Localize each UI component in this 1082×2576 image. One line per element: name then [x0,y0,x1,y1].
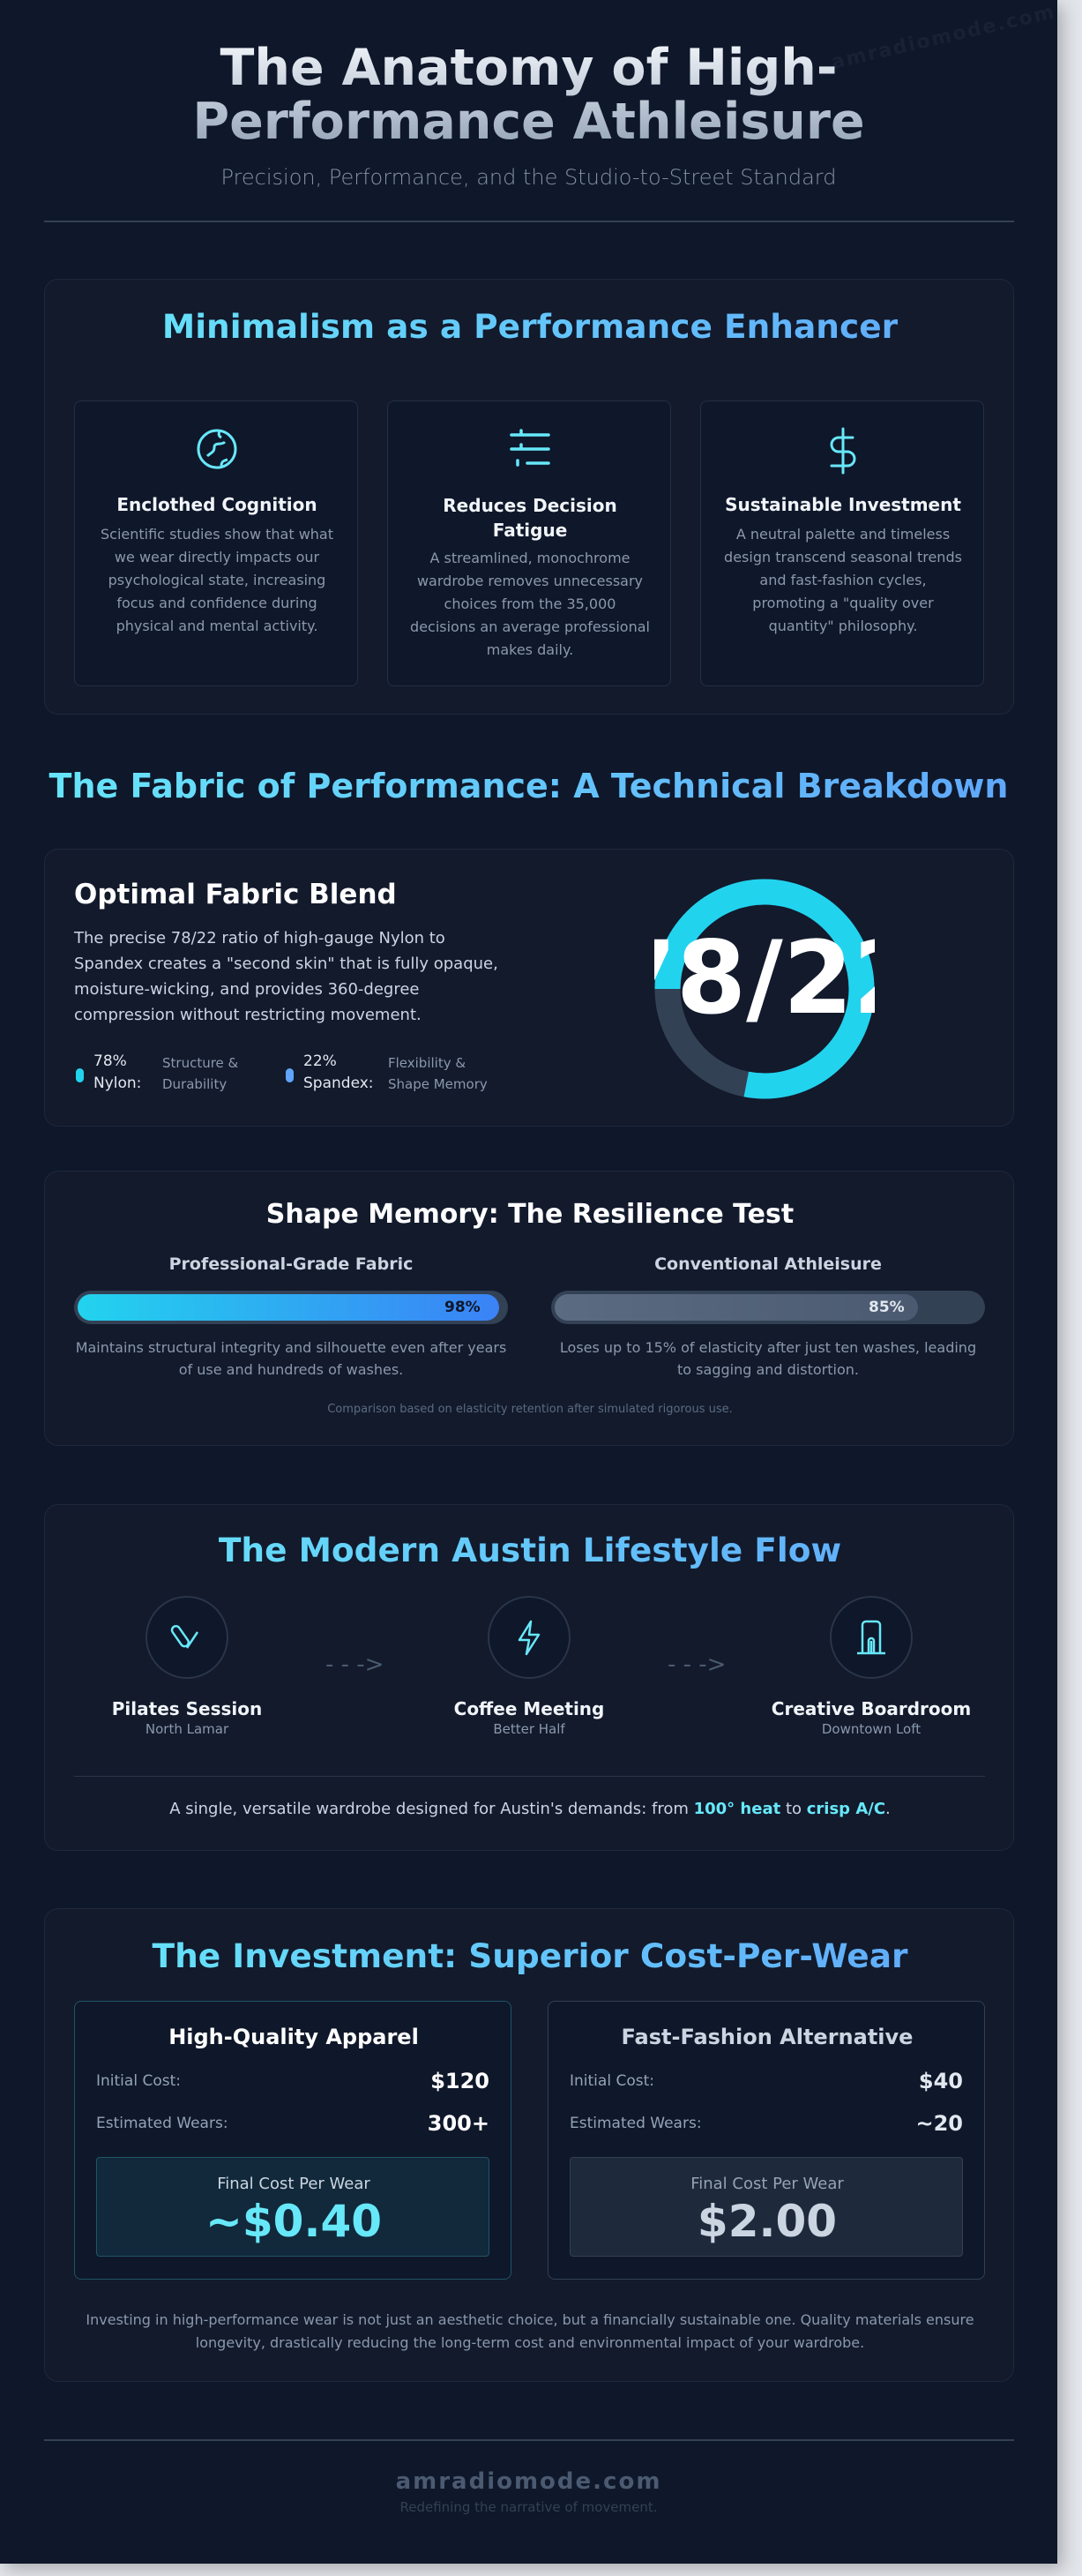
icon: bolt [519,1620,540,1655]
card: high quality [74,2001,511,2280]
step: coffee: Coffee Meeting [454,1698,604,1719]
step: pilates: Pilates Session [112,1698,262,1719]
icon: sliders [510,429,550,467]
bar: professional: Maintains structural integrity and silhouette even after years of use and hundreds of washes. [76,1339,506,1378]
card: fast fashion: Estimated Wears: [570,2115,702,2132]
heading: fabric of performance: The Fabric of Performance: A Technical Breakdown [49,767,1008,805]
card: decision fatigue: A streamlined, monochrome wardrobe removes unnecessary choices from the 35,000 decisions an average professional makes daily. [410,550,650,658]
title [0,41,1057,149]
bar: professional [74,1254,508,1378]
legend [76,1052,488,1092]
legend: Flexibility & [388,1055,466,1071]
heading: minimalism: Minimalism as a Performance Enhancer [162,307,898,346]
panel: minimalism [44,279,1014,715]
panel: shape memory: Shape Memory: The Resilience Test [266,1199,794,1230]
card: decision fatigue [387,401,671,686]
panel: lifestyle flow: The Modern Austin Lifestyle Flow [219,1531,841,1569]
card: fast fashion: ~20 [915,2111,963,2136]
icon: dollar [831,427,855,475]
card: enclothed cognition [74,401,358,686]
card: high quality: Estimated Wears: [96,2115,228,2132]
callout: cost per wear [96,2157,489,2257]
card: high quality: $120 [430,2069,489,2093]
watermark: amradiomode.com [830,1,1057,74]
bar: conventional: 85% [869,1299,905,1316]
step: pilates [112,1596,262,1737]
step: boardroom [772,1596,971,1737]
card: enclothed cognition: Scientific studies show that what we wear directly impacts our psychological state, increasing focus and confidence during physical and mental activity. [101,526,333,634]
card: enclothed cognition: Enclothed Cognition [116,494,317,515]
callout: cost per wear: $2.00 [698,2196,837,2247]
card: high quality: High-Quality Apparel [168,2025,419,2049]
footer [396,2468,661,2515]
card: high quality: 300+ [428,2111,489,2136]
card: fast fashion [548,2001,985,2280]
legend: Spandex: [303,1075,374,1092]
callout: cost per wear: ~$0.40 [205,2196,382,2247]
bar: conventional [551,1254,985,1378]
arrow: - - -> [325,1651,384,1678]
callout: cost per wear: Final Cost Per Wear [690,2175,844,2193]
panel: lifestyle flow [44,1504,1014,1851]
legend: Nylon: [93,1075,141,1092]
card: fast fashion: $40 [919,2069,963,2093]
step: boardroom: Creative Boardroom [772,1698,971,1719]
legend: 78% [93,1052,127,1070]
callout: cost per wear [570,2157,963,2257]
title: Performance Athleisure [192,93,865,151]
legend: Durability [162,1076,227,1092]
subtitle: Precision, Performance, and the Studio-to-Street Standard [221,165,836,190]
card: fast fashion: Fast-Fashion Alternative [622,2025,913,2049]
card: decision fatigue: Reduces Decision [443,495,617,516]
footnote: Comparison based on elasticity retention after simulated rigorous use. [327,1403,733,1416]
panel: optimal fabric blend [44,849,1014,1127]
legend: Shape Memory [388,1076,488,1092]
card: high quality: Initial Cost: [96,2072,181,2090]
step: boardroom: Downtown Loft [822,1721,921,1737]
text: investment note: Investing in high-performance wear is not just an aesthetic choice, but a financially sustainable one. Quality materials ensure longevity, drastically reducing the long-term cost and environmental impact of your wardrobe. [86,2311,974,2351]
icon: pilates [171,1625,198,1649]
arrow: - - -> [668,1651,726,1678]
card: fast fashion: Initial Cost: [570,2072,654,2090]
bar: professional: Professional-Grade Fabric [169,1254,413,1274]
bar: professional: 98% [444,1299,481,1316]
legend: Structure & [162,1055,238,1071]
bar: conventional: Conventional Athleisure [654,1254,882,1274]
callout: cost per wear: Final Cost Per Wear [217,2175,370,2193]
card: sustainable investment: A neutral palette and timeless design transcend seasonal trends and fast-fashion cycles, promoting a "quality over quantity" philosophy. [724,526,962,634]
footer: amradiomode.com [396,2468,661,2495]
panel: optimal fabric blend: Optimal Fabric Blend [74,879,397,910]
bar: conventional: Loses up to 15% of elasticity after just ten washes, leading to sagging and distortion. [560,1339,976,1378]
panel: shape memory [44,1171,1014,1446]
text block: The precise 78/22 ratio of high-gauge Nylon to Spandex creates a "second skin" that is fully opaque, moisture-wicking, and provides 360-degree compression without restricting movement. [74,929,498,1024]
card: sustainable investment: Sustainable Investment [725,494,961,515]
text: austin demands: A single, versatile wardrobe designed for Austin's demands: from 100° heat to crisp A/C. [169,1800,891,1818]
panel: investment: The Investment: Superior Cost-Per-Wear [152,1936,908,1975]
footer: Redefining the narrative of movement. [399,2499,658,2515]
chart: donut 78/22 [654,879,875,1099]
icon: brain/globe [198,429,236,469]
title: The Anatomy of High- [220,39,838,97]
icon: building [857,1620,885,1655]
legend: 22% [303,1052,337,1070]
card: decision fatigue: Fatigue [493,520,567,541]
step: pilates: North Lamar [146,1721,228,1737]
step: coffee [454,1596,604,1737]
card: sustainable investment [700,401,984,686]
panel: investment [44,1908,1014,2382]
step: coffee: Better Half [493,1721,565,1737]
